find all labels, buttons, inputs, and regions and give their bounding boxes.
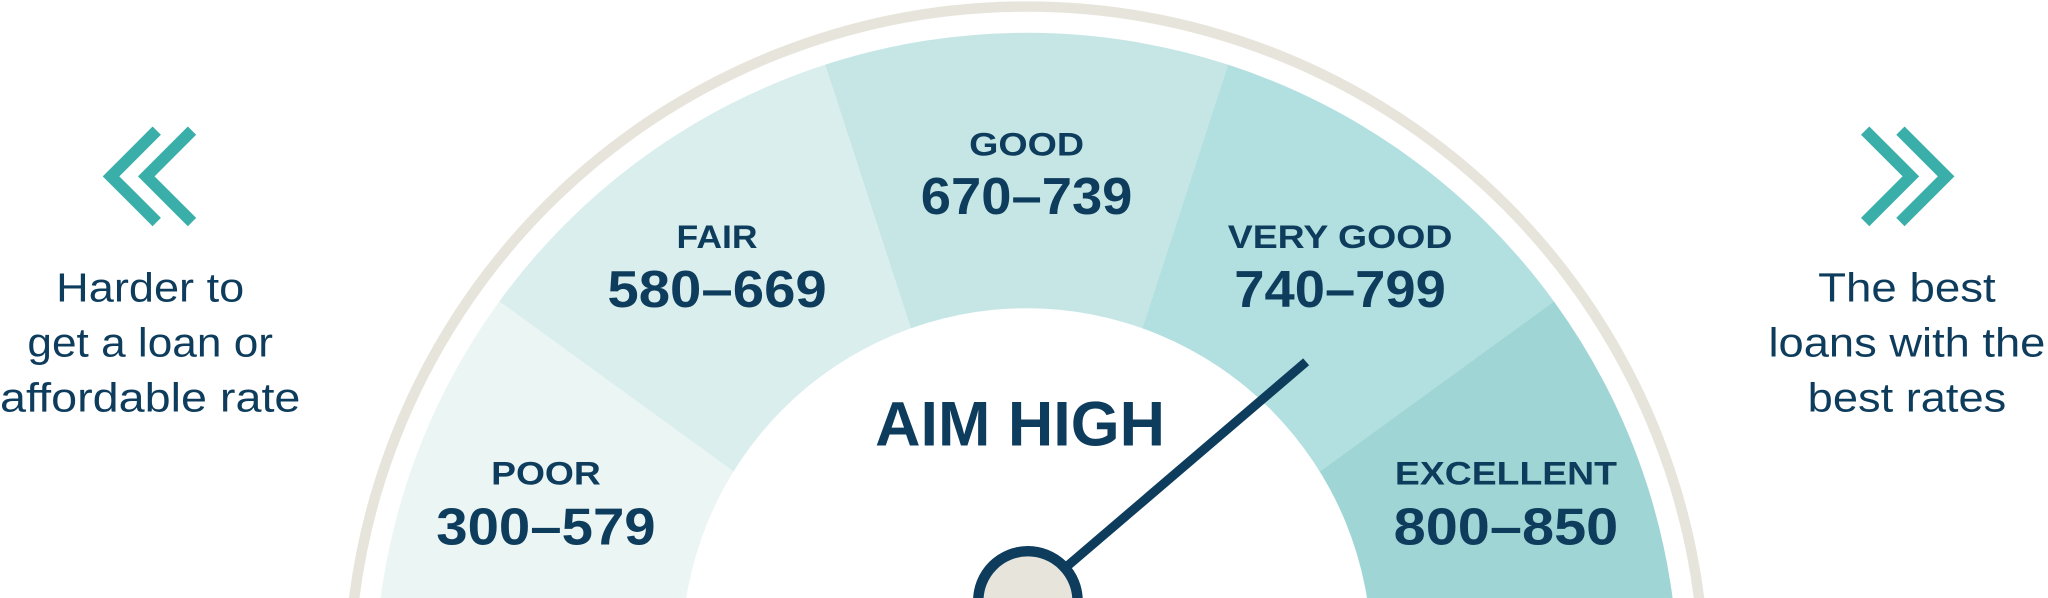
gauge segments bbox=[375, 33, 1678, 598]
segment: fair bbox=[499, 65, 1027, 598]
segment: good bbox=[825, 33, 1228, 598]
text: left: affordable rate bbox=[0, 374, 300, 420]
text: right bbox=[1768, 265, 2045, 420]
text: right: loans with the bbox=[1768, 320, 2045, 366]
text: left: get a loan or bbox=[27, 320, 273, 366]
heading: aim high: AIM HIGH bbox=[875, 389, 1165, 459]
outer ring bbox=[349, 7, 1704, 598]
text: left: Harder to bbox=[56, 265, 244, 311]
text: right: The best bbox=[1818, 265, 1996, 311]
segment: very good bbox=[1027, 65, 1554, 598]
label: good: 670–739 bbox=[921, 168, 1132, 226]
label: excellent bbox=[1394, 455, 1618, 557]
icon: right chevrons bbox=[1865, 131, 1946, 222]
segment: excellent bbox=[1027, 301, 1678, 598]
label: poor: 300–579 bbox=[436, 499, 656, 557]
text: right: best rates bbox=[1808, 374, 2006, 420]
icon: left chevrons bbox=[111, 131, 192, 222]
label: fair bbox=[607, 218, 827, 319]
label: fair: 580–669 bbox=[607, 261, 827, 319]
label: very good: 740–799 bbox=[1234, 261, 1446, 319]
label: fair: FAIR bbox=[677, 218, 758, 255]
needle bbox=[978, 362, 1306, 598]
inner white area bbox=[682, 308, 1371, 598]
label: excellent: EXCELLENT bbox=[1395, 455, 1617, 492]
segment: poor bbox=[375, 301, 1027, 598]
label: poor bbox=[436, 455, 656, 557]
label: excellent: 800–850 bbox=[1394, 499, 1618, 557]
label: good: GOOD bbox=[969, 125, 1084, 162]
label: very good: VERY GOOD bbox=[1228, 218, 1452, 255]
label: very good bbox=[1228, 218, 1452, 319]
label: good bbox=[921, 125, 1132, 226]
label: poor: POOR bbox=[491, 455, 601, 492]
text: left bbox=[0, 265, 300, 420]
